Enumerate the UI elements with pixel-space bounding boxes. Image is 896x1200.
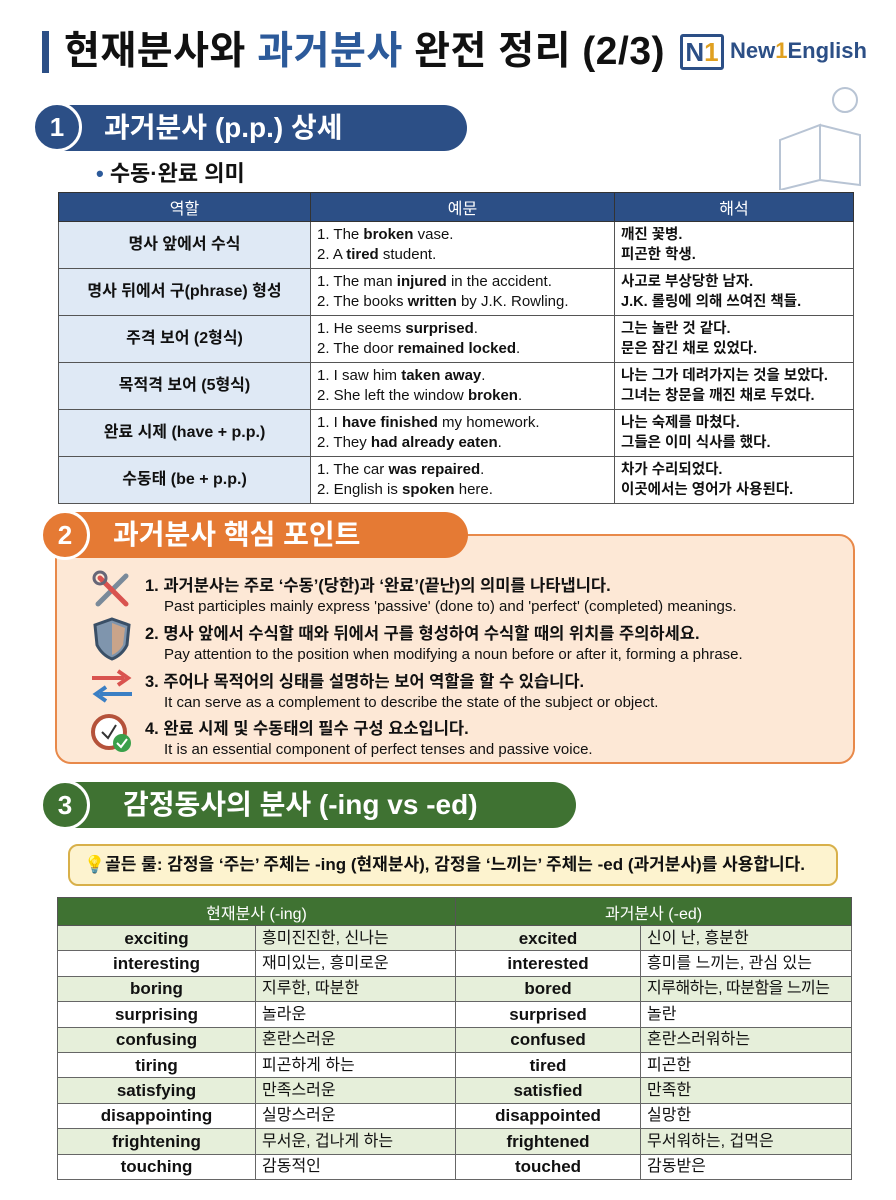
table: emotion participles: 지루해하는, 따분함을 느끼는 xyxy=(647,980,830,997)
icon: book decoration xyxy=(779,87,861,190)
table: emotion participles: 놀란 xyxy=(647,1006,676,1023)
table: emotion participles: 만족한 xyxy=(647,1082,691,1099)
icon: arrows xyxy=(92,669,132,703)
table: emotion participles: 재미있는, 흥미로운 xyxy=(262,955,389,972)
point 4: 4. 완료 시제 및 수동태의 필수 구성 요소입니다. xyxy=(145,720,469,738)
table: past participle roles: 나는 그가 데려가지는 것을 보았다. xyxy=(621,368,828,384)
table: emotion participles: 지루한, 따분한 xyxy=(262,980,359,997)
table: past participle roles: 1. I have finished my homework. xyxy=(317,414,540,431)
table: past participle roles: 주격 보어 (2형식) xyxy=(126,330,243,347)
point 4 xyxy=(145,720,593,758)
table: emotion participles: 무서워하는, 겁먹은 xyxy=(647,1133,774,1150)
point 2 xyxy=(145,624,743,663)
table: emotion participles: boring xyxy=(130,979,183,998)
table: emotion participles: frightening xyxy=(112,1132,201,1151)
table: emotion participles: 놀라운 xyxy=(262,1006,306,1023)
section 2 heading xyxy=(43,512,468,560)
table: past participle roles: 1. The broken vase. xyxy=(317,226,453,243)
table: emotion participles: satisfied xyxy=(514,1081,582,1100)
table: past participle roles: 2. The books written by J.K. Rowling. xyxy=(317,293,569,310)
table: past participle roles: 그들은 이미 식사를 했다. xyxy=(621,435,771,451)
table: past participle roles: 2. A tired student. xyxy=(317,246,436,263)
table: emotion participles: frightened xyxy=(506,1132,590,1151)
table: past participle roles: 목적격 보어 (5형식) xyxy=(119,377,250,394)
table: past participle roles: 차가 수리되었다. xyxy=(621,462,722,478)
table: emotion participles: tired xyxy=(530,1056,566,1075)
table: emotion participles: touching xyxy=(121,1157,192,1176)
table: past participle roles: 1. I saw him taken away. xyxy=(317,367,485,384)
table: past participle roles: 그녀는 창문을 깨진 채로 두었다. xyxy=(621,388,815,404)
table: emotion participles: bored xyxy=(524,979,572,998)
table: emotion participles: satisfying xyxy=(117,1081,196,1100)
table: emotion participles: surprised xyxy=(509,1005,587,1024)
point 1: 1. 과거분사는 주로 ‘수동’(당한)과 ‘완료’(끝난)의 의미를 나타냅니다. xyxy=(145,577,611,595)
point 3: It can serve as a complement to describe the state of the subject or object. xyxy=(164,694,658,711)
table: past participle roles: 2. English is spoken here. xyxy=(317,481,493,498)
callout: golden rule: 💡골든 룰: 감정을 ‘주는’ 주체는 -ing (현재분사), 감정을 ‘느끼는’ 주체는 -ed (과거분사)를 사용합니다. xyxy=(84,855,805,874)
panel: key points xyxy=(55,534,855,764)
logo: N1 xyxy=(685,37,719,67)
table: emotion participles: excited xyxy=(519,929,577,948)
table: emotion participles: 만족스러운 xyxy=(262,1082,336,1099)
table: emotion participles: confusing xyxy=(116,1030,197,1049)
table: past participle roles: 명사 앞에서 수식 xyxy=(129,236,240,253)
table: emotion participles: confused xyxy=(510,1030,586,1049)
section 1 heading: 1 xyxy=(50,112,64,142)
table: emotion participles: interested xyxy=(507,954,589,973)
table: past participle roles: 피곤한 학생. xyxy=(621,247,696,263)
table: emotion participles: 무서운, 겁나게 하는 xyxy=(262,1133,393,1150)
table: emotion participles: touched xyxy=(515,1157,581,1176)
point 3: 3. 주어나 목적어의 싱태를 설명하는 보어 역할을 할 수 있습니다. xyxy=(145,673,584,691)
callout: golden rule xyxy=(68,844,838,886)
table: emotion participles: 감동적인 xyxy=(262,1158,321,1175)
table: emotion participles: disappointed xyxy=(495,1106,601,1125)
section 3 heading xyxy=(43,782,576,828)
table: past participle roles: 1. The man injured in the accident. xyxy=(317,273,552,290)
table: past participle roles: 예문 xyxy=(448,201,477,218)
logo xyxy=(680,34,867,70)
subheading: • 수동·완료 의미 xyxy=(96,161,245,186)
table: past participle roles: 1. He seems surprised. xyxy=(317,320,478,337)
table: emotion participles: interesting xyxy=(113,954,200,973)
table: emotion participles: 혼란스러운 xyxy=(262,1031,336,1048)
section 1 heading xyxy=(35,105,467,151)
table: emotion participles: 피곤하게 하는 xyxy=(262,1057,355,1074)
table: past participle roles: 해석 xyxy=(719,201,749,218)
table: emotion participles: 혼란스러워하는 xyxy=(647,1031,750,1048)
section 2 heading: 2 xyxy=(58,520,72,550)
table: emotion participles: exciting xyxy=(124,929,189,948)
table: past participle roles xyxy=(58,192,854,504)
table: past participle roles: 이곳에서는 영어가 사용된다. xyxy=(621,482,793,498)
point 2: 2. 명사 앞에서 수식할 때와 뒤에서 구를 형성하여 수식할 때의 위치를 주의하세요. xyxy=(145,625,700,643)
table: emotion participles: 실망스러운 xyxy=(262,1107,336,1124)
section 1 heading: 과거분사 (p.p.) 상세 xyxy=(104,112,343,143)
table: past participle roles: 수동태 (be + p.p.) xyxy=(122,471,247,488)
table: emotion participles: disappointing xyxy=(101,1106,212,1125)
table: past participle roles: J.K. 롤링에 의해 쓰여진 책들. xyxy=(621,294,801,310)
table: past participle roles: 명사 뒤에서 구(phrase) 형성 xyxy=(87,283,282,300)
table: past participle roles: 1. The car was repaired. xyxy=(317,461,484,478)
table: emotion participles: 실망한 xyxy=(647,1107,691,1124)
table: emotion participles: 피곤한 xyxy=(647,1057,691,1074)
table: past participle roles: 역할 xyxy=(170,201,199,218)
table: emotion participles: 흥미를 느끼는, 관심 있는 xyxy=(647,955,812,972)
point 1 xyxy=(145,576,737,615)
table: emotion participles: 흥미진진한, 신나는 xyxy=(262,930,389,947)
table: emotion participles: tiring xyxy=(135,1056,178,1075)
table: past participle roles: 2. They had already eaten. xyxy=(317,434,502,451)
table: past participle roles: 2. The door remained locked. xyxy=(317,340,520,357)
icon: shield xyxy=(93,617,131,661)
table: emotion participles: surprising xyxy=(115,1005,198,1024)
section 2 heading: 과거분사 핵심 포인트 xyxy=(113,519,360,550)
table: past participle roles: 완료 시제 (have + p.p.) xyxy=(104,424,265,441)
point 3 xyxy=(145,672,658,711)
section 3 heading: 3 xyxy=(58,790,72,820)
table: past participle roles: 사고로 부상당한 남자. xyxy=(621,274,753,290)
table: past participle roles: 깨진 꽃병. xyxy=(621,227,682,243)
icon: tools xyxy=(92,570,128,606)
icon: clock check xyxy=(91,714,131,752)
table: past participle roles: 문은 잠긴 채로 있었다. xyxy=(621,341,757,357)
table: past participle roles: 그는 놀란 것 같다. xyxy=(621,321,730,337)
table: emotion participles: 과거분사 (-ed) xyxy=(605,906,702,922)
title: 현재분사와 과거분사 완전 정리 (2/3) xyxy=(64,30,665,73)
table: emotion participles xyxy=(57,897,852,1180)
point 4: It is an essential component of perfect tenses and passive voice. xyxy=(164,741,593,758)
point 2: Pay attention to the position when modifying a noun before or after it, forming a phrase. xyxy=(164,646,743,663)
section 3 heading: 감정동사의 분사 (-ing vs -ed) xyxy=(123,789,478,820)
point 1: Past participles mainly express 'passive' (done to) and 'perfect' (completed) meanings. xyxy=(164,598,737,615)
table: emotion participles: 감동받은 xyxy=(647,1158,706,1175)
table: past participle roles: 2. She left the window broken. xyxy=(317,387,522,404)
table: emotion participles: 현재분사 (-ing) xyxy=(206,906,307,922)
table: emotion participles: 신이 난, 흥분한 xyxy=(647,930,749,947)
logo: New1English xyxy=(730,38,867,63)
table: past participle roles: 나는 숙제를 마쳤다. xyxy=(621,415,740,431)
